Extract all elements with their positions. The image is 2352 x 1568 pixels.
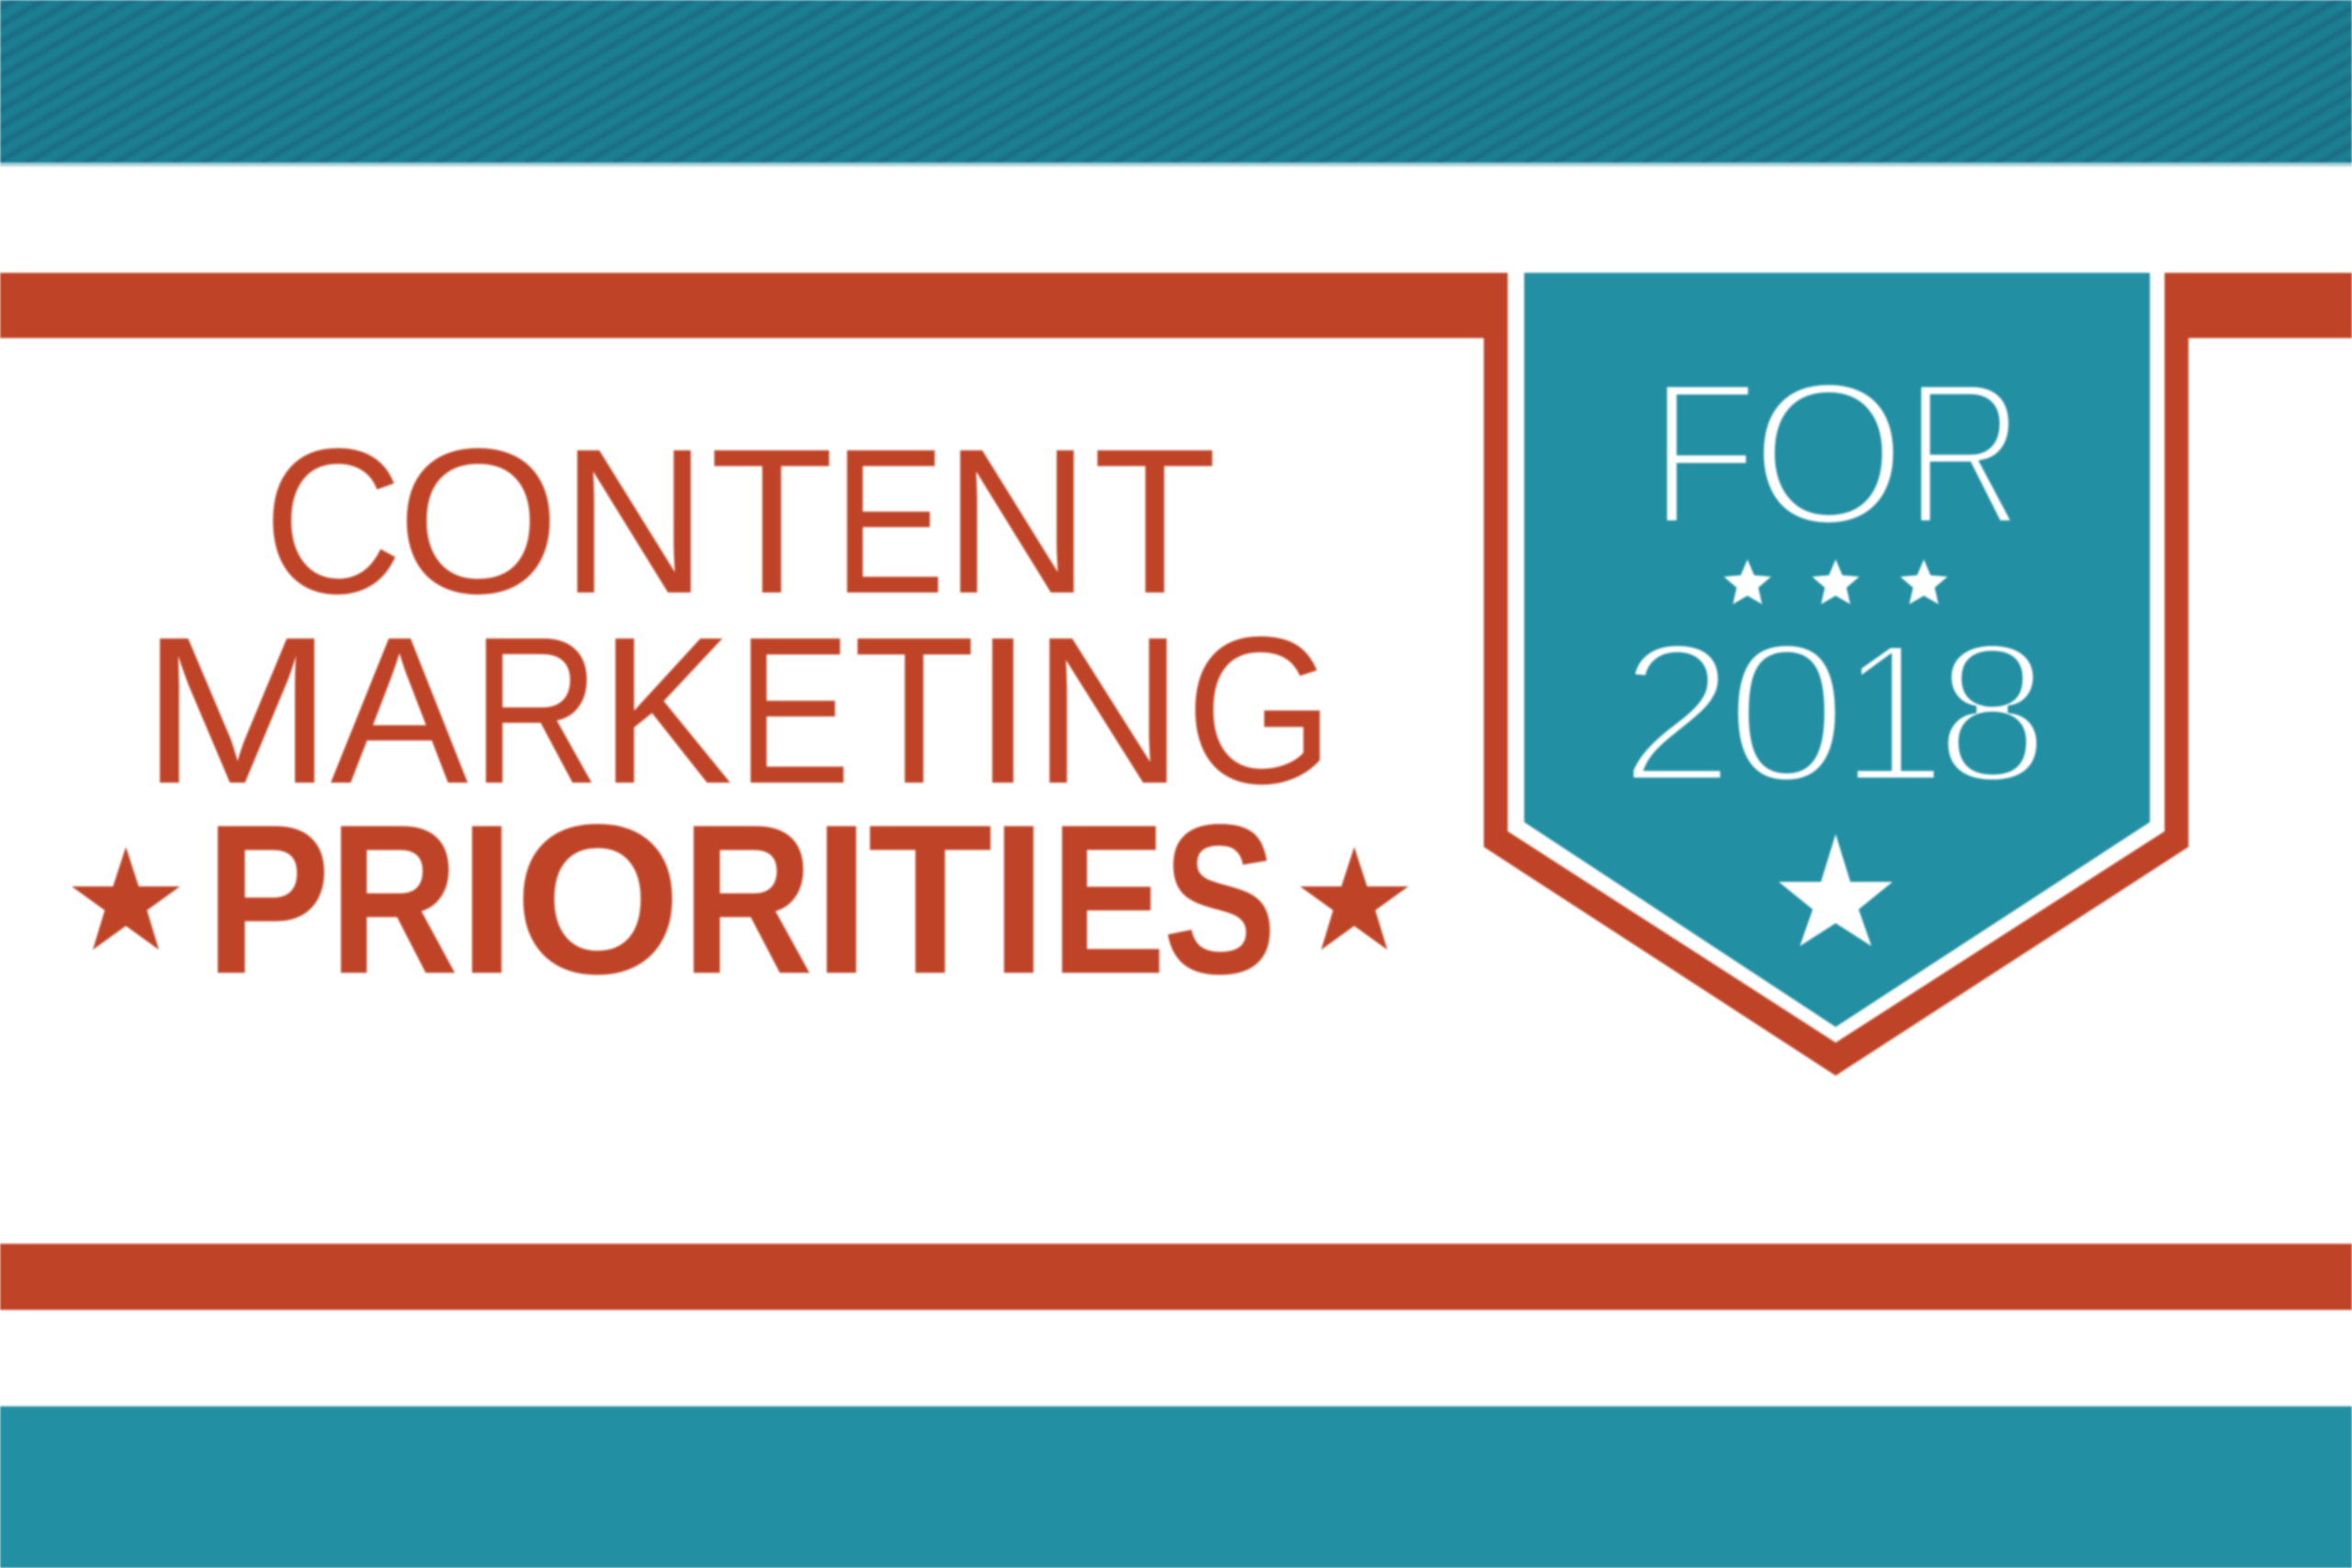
large star <box>1779 834 1893 946</box>
badge text: 2018: 0 <box>1725 602 1849 825</box>
title line: CONTENT: N <box>560 405 707 637</box>
title line: MARKETING: G <box>1186 594 1334 828</box>
title line: CONTENT: O <box>397 405 560 637</box>
title line: MARKETING: E <box>737 594 851 828</box>
title line: MARKETING: N <box>1033 594 1183 828</box>
bottom teal band <box>0 1406 2352 1568</box>
badge text: 2018: 8 <box>1935 602 2050 825</box>
title line: PRIORITIES: T <box>867 781 992 1019</box>
title <box>72 405 1408 1019</box>
title line: MARKETING: I <box>971 594 1035 828</box>
three small stars <box>1724 559 1948 604</box>
title line: MARKETING: T <box>853 594 976 828</box>
title line: PRIORITIES: I <box>813 781 870 1019</box>
title line: CONTENT: T <box>1093 405 1216 637</box>
badge teal panel <box>1524 273 2150 1027</box>
title line: PRIORITIES: O <box>514 781 681 1019</box>
red ribbon upper bar <box>0 273 2352 338</box>
title line: PRIORITIES: E <box>1050 781 1166 1019</box>
title line: MARKETING: R <box>471 594 600 828</box>
badge text: 2018: 2 <box>1619 602 1735 825</box>
right star <box>1300 847 1408 950</box>
title line: PRIORITIES: R <box>329 781 458 1019</box>
left star <box>72 847 180 950</box>
badge text: 2018: 1 <box>1838 602 1948 825</box>
badge <box>1484 273 2188 1076</box>
red lower bar <box>0 1244 2352 1310</box>
badge text: FOR: F <box>1648 339 1758 569</box>
title line: MARKETING: M <box>141 594 334 828</box>
title line: MARKETING: A <box>331 594 469 828</box>
badge white inner border <box>1508 273 2165 1043</box>
badge red outline <box>1484 273 2188 1076</box>
title line: MARKETING: K <box>599 594 732 828</box>
title line: PRIORITIES: R <box>682 781 813 1019</box>
title line: PRIORITIES: I <box>458 781 515 1019</box>
title line: PRIORITIES: P <box>205 781 331 1019</box>
title line: PRIORITIES: I <box>990 781 1047 1019</box>
title line: CONTENT: N <box>944 405 1091 637</box>
title line: CONTENT: C <box>263 405 402 637</box>
title line: CONTENT: T <box>709 405 834 637</box>
badge text: FOR: R <box>1905 339 2024 569</box>
title line: PRIORITIES: S <box>1163 781 1276 1019</box>
title line: CONTENT: E <box>833 405 945 637</box>
badge text: FOR: O <box>1750 339 1906 569</box>
top striped band <box>0 0 2352 166</box>
